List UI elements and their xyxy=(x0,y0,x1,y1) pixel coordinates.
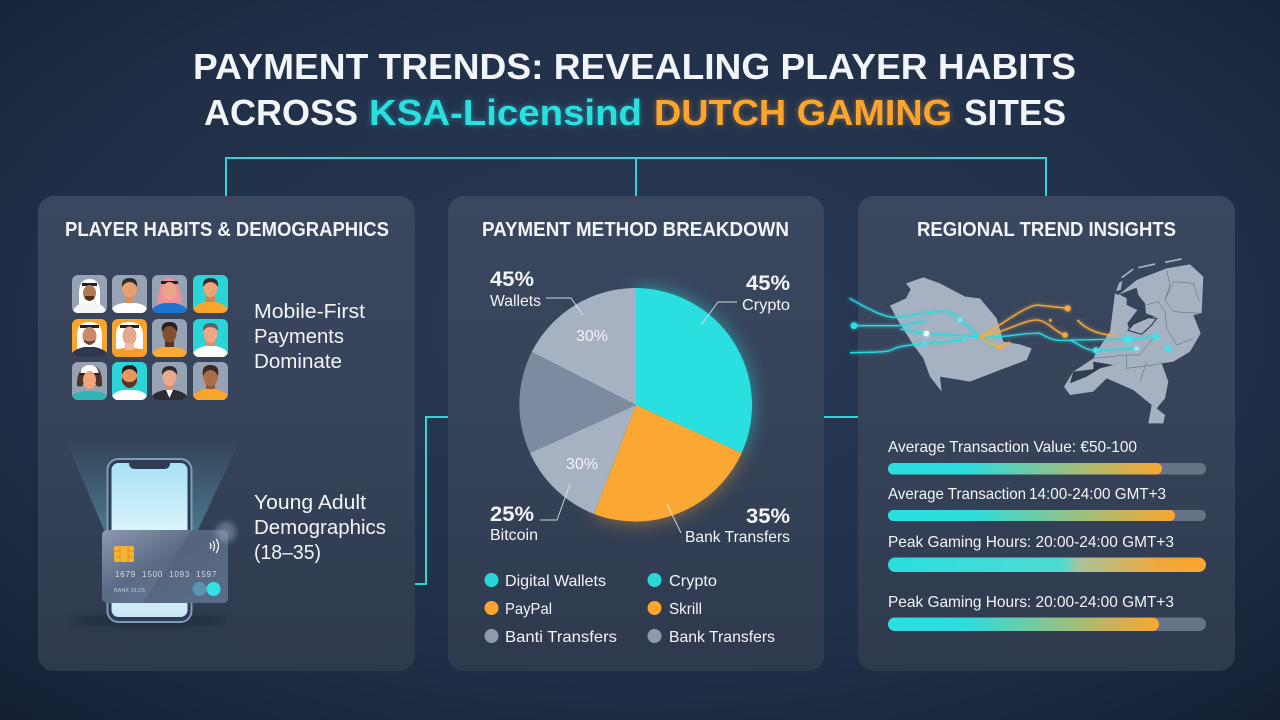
stat bar: peak gaming hours xyxy=(888,534,1206,572)
pie label: crypto: Crypto xyxy=(742,297,790,314)
stat bar: peak gaming hours: Peak Gaming Hours: 20:00-24:00 GMT+3 xyxy=(888,534,1174,551)
text: mobile-first payments xyxy=(254,301,365,373)
pie label: bank transfers: 35% xyxy=(746,505,790,528)
map: nodes xyxy=(851,305,1172,353)
icon: card chip xyxy=(114,546,134,562)
legend: Digital Wallets xyxy=(505,573,606,590)
pie label: bitcoin xyxy=(490,503,538,544)
text: young adult demographics: Young Adult xyxy=(254,492,366,514)
stat bar: average transaction value: Average Transaction Value: €50-100 xyxy=(888,439,1137,456)
icon: card circles xyxy=(192,582,220,596)
legend: Crypto xyxy=(669,573,717,590)
pie slice value: wallets inner: 30% xyxy=(576,328,608,345)
connector lines: top bracket xyxy=(226,158,1046,196)
icon: phone with payment card xyxy=(66,440,240,628)
legend: PayPal xyxy=(505,601,552,618)
pie label: wallets: 45% xyxy=(490,268,534,291)
connector lines: side links xyxy=(415,417,858,584)
map: Netherlands shape xyxy=(1064,259,1203,423)
heading: payment method: PAYMENT METHOD BREAKDOWN xyxy=(482,219,789,241)
map: orange routes xyxy=(980,305,1117,347)
leader lines xyxy=(540,298,737,533)
stat bar: average transaction hours: Average Transaction xyxy=(888,486,1026,503)
title: KSA-Licensind xyxy=(369,92,642,133)
legend: Bank Transfers xyxy=(669,629,775,646)
panel: regional trend insights xyxy=(849,196,1235,671)
pie chart xyxy=(519,288,752,533)
pie label: wallets: Wallets xyxy=(490,293,541,310)
title: SITES xyxy=(964,92,1066,133)
pie label: wallets xyxy=(490,268,541,310)
text: card number: 1679 1500 1093 1597 xyxy=(115,570,217,579)
text: mobile-first payments: Payments xyxy=(254,326,344,348)
pie label: crypto xyxy=(742,272,790,314)
map: teal routes xyxy=(849,298,1155,353)
title: PAYMENT TRENDS: REVEALING PLAYER HABITS xyxy=(193,46,1076,87)
icon: avatar grid xyxy=(72,275,228,400)
title: DUTCH GAMING xyxy=(654,92,952,133)
pie label: bank transfers xyxy=(685,505,790,546)
icon: contactless xyxy=(210,539,218,553)
text: young adult demographics: (18–35) xyxy=(254,542,321,564)
pie label: bank transfers: Bank Transfers xyxy=(685,529,790,546)
map: regional flows between Saudi Arabia and the Netherlands xyxy=(849,259,1203,423)
map: KSA shape xyxy=(890,277,1032,392)
stat bar: peak gaming hours second: Peak Gaming Hours: 20:00-24:00 GMT+3 xyxy=(888,594,1174,611)
legend xyxy=(484,573,775,646)
panel: player habits and demographics xyxy=(38,196,415,671)
pie slice value: bitcoin inner: 30% xyxy=(566,456,598,473)
pie label: bitcoin: Bitcoin xyxy=(490,527,538,544)
pie label: crypto: 45% xyxy=(746,272,790,295)
text: mobile-first payments: Mobile-First xyxy=(254,301,365,323)
panel: payment method breakdown xyxy=(448,196,824,671)
legend: Banti Transfers xyxy=(505,629,617,646)
pie label: bitcoin: 25% xyxy=(490,503,534,526)
stat bar: peak gaming hours second xyxy=(888,594,1206,631)
heading: player habits: PLAYER HABITS & DEMOGRAPHICS xyxy=(65,219,389,241)
text: mobile-first payments: Dominate xyxy=(254,351,342,373)
heading: regional trends: REGIONAL TREND INSIGHTS xyxy=(917,219,1176,241)
legend: Skrill xyxy=(669,601,702,618)
text: young adult demographics xyxy=(254,492,386,564)
stat bar: average transaction hours xyxy=(888,486,1206,521)
text: card holder: BANK 01/25 xyxy=(114,588,145,594)
title xyxy=(193,46,1076,133)
stat bar: average transaction value xyxy=(888,439,1206,474)
text: young adult demographics: Demographics xyxy=(254,517,386,539)
title: KSA-Licensind xyxy=(369,92,642,133)
title: DUTCH GAMING xyxy=(654,92,952,133)
title: ACROSS xyxy=(204,92,358,133)
stat bar: average transaction hours: 14:00-24:00 GMT+3 xyxy=(1029,486,1166,503)
